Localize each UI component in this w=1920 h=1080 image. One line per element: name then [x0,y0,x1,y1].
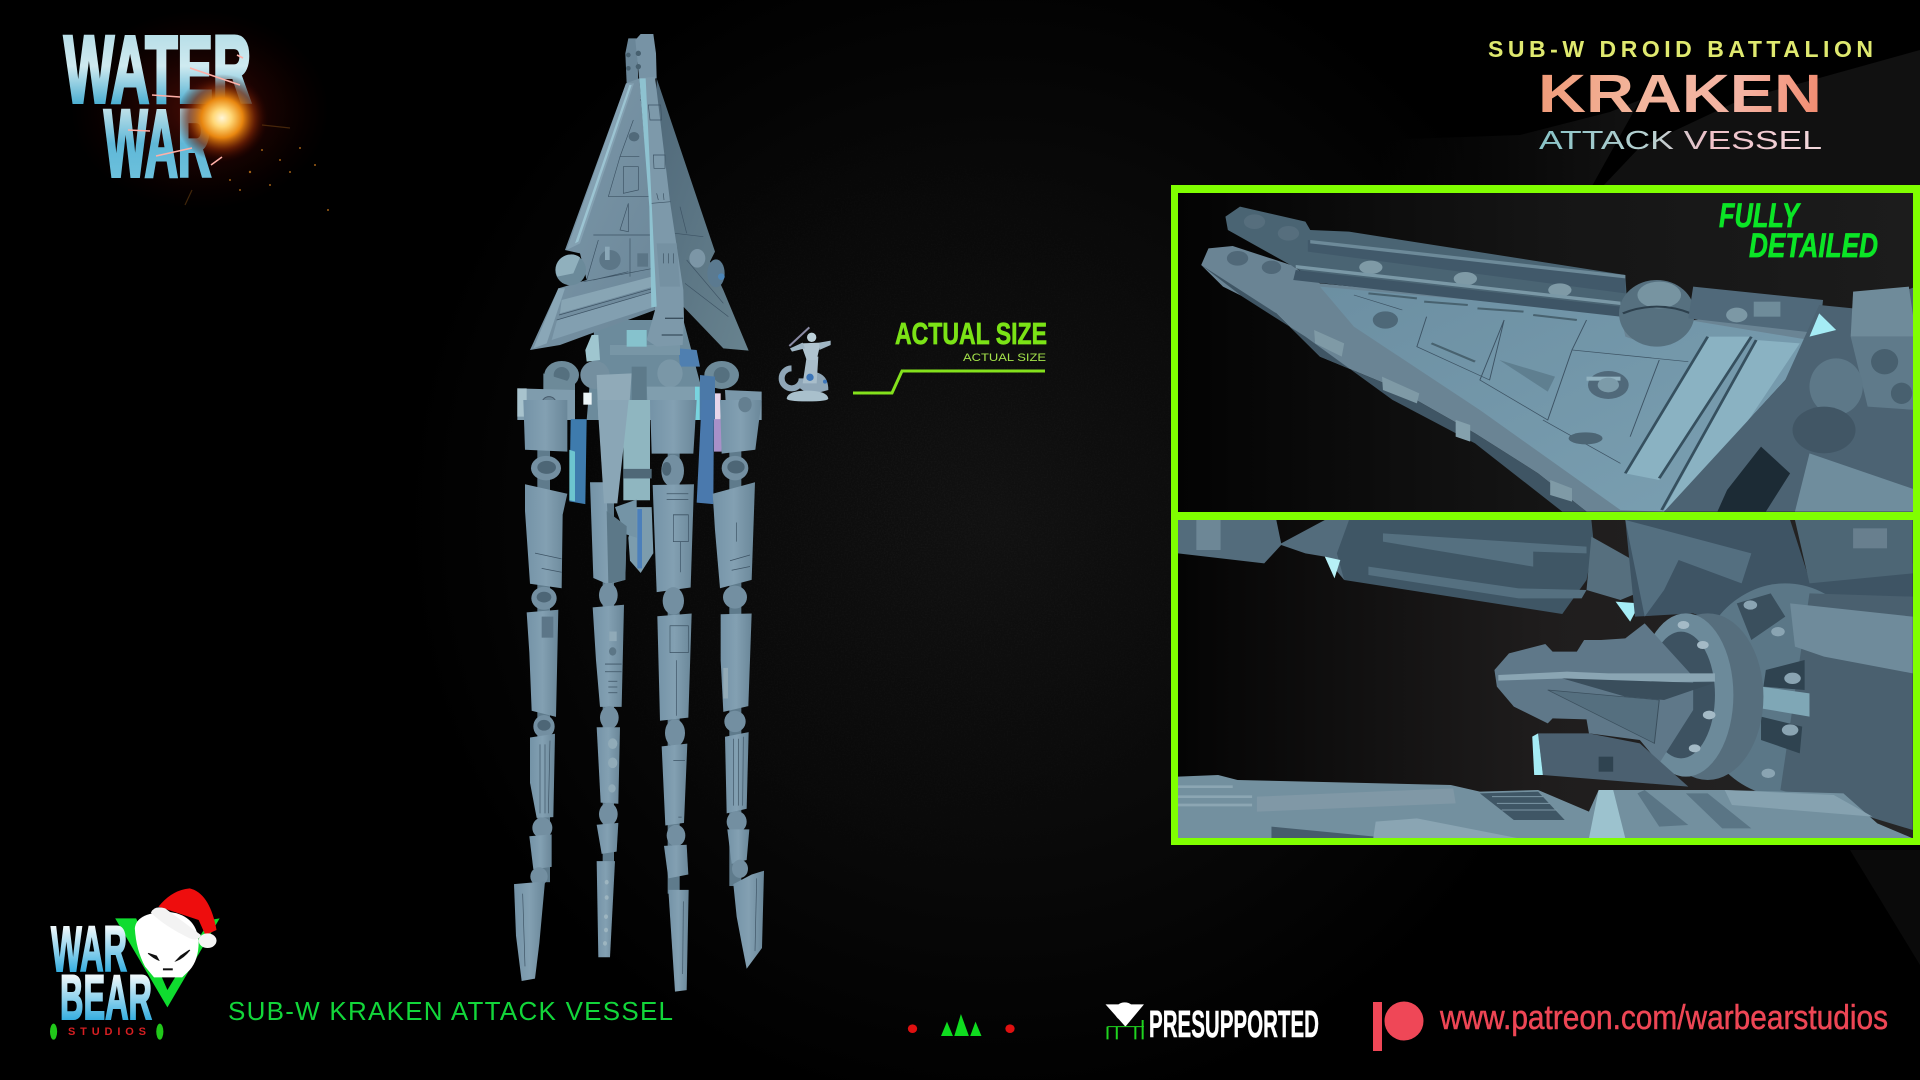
panel: wing detail [1178,193,1916,512]
logo: Water War: WATER [64,17,251,123]
lower wing bands [560,277,653,313]
right upper block [1625,520,1913,617]
title: battalion: SUB-W DROID BATTALION [1488,36,1873,62]
santa hat [158,888,217,935]
rear plate [1688,287,1823,333]
icon: patreon [1373,1002,1424,1051]
leg 3 [650,400,697,992]
hull stripes [1625,337,1751,480]
lower hull [1178,775,1913,838]
lower bracket [1538,733,1688,787]
badge: presupported [1106,1002,1319,1046]
subtitle: attack vessel: ATTACK VESSEL [1539,125,1822,155]
blue panels [569,400,722,504]
background [568,50,1920,964]
title: Kraken: KRAKEN [1538,64,1822,124]
logo word: studios: STUDIOS [68,1026,146,1038]
patreon link [1373,999,1888,1051]
label: fully detailed [1719,203,1878,258]
centre spine [639,77,684,347]
logo emblem [50,888,220,1040]
drum rear [1720,584,1825,792]
model: Kraken upper hull [530,34,749,351]
callout heading: ACTUAL SIZE [895,316,1047,351]
dark upper rail [1225,207,1628,313]
nozzle [1494,623,1693,763]
label: fully detailed: FULLY [1719,197,1801,235]
model: Kraken legs [514,397,764,992]
left wing face [530,78,655,350]
leg 2 [590,400,629,957]
hull grilles [1314,330,1344,357]
shoulder joints [544,361,579,389]
logo: Water War: WAR [104,91,211,197]
turrets [599,132,705,270]
title block [1488,36,1873,155]
hull tips [625,34,657,83]
panel: detail views frame [1171,185,1920,845]
hull turrets [1588,371,1629,399]
dome turret [1619,280,1695,347]
logo word: war: WAR [51,913,127,985]
upper arm block [1337,520,1594,614]
skull [135,912,199,977]
neck [587,320,710,420]
badge text: PRESUPPORTED [1149,1004,1319,1046]
centre thruster [615,400,653,573]
logo word: bear: BEAR [60,963,152,1033]
icon: festive trees and dots [908,1014,1015,1036]
logo: War Bear Studios [50,888,220,1040]
right machinery [1664,287,1916,512]
leg 1 [514,400,567,981]
model: Kraken body [517,320,762,420]
holly leaves [50,1024,57,1040]
label: fully detailed: DETAILED [1749,227,1878,265]
panel: thruster detail [1178,520,1913,838]
hull body [1201,246,1824,512]
callout leader line [853,371,1045,393]
logo: Water War [64,10,330,211]
figure: actual-size miniature [782,327,831,401]
hull face [1320,287,1809,512]
drum ring [1691,614,1764,780]
shoulder blocks [543,373,575,390]
left edge stripes [567,83,634,250]
leg 4 [713,397,764,969]
hull spheres [555,254,725,287]
callout sub-caption: ACTUAL SIZE [963,352,1046,364]
upper left arm [1178,520,1349,580]
elbow joint [1586,537,1633,600]
right wing face [653,78,749,351]
caption: model name: SUB-W KRAKEN ATTACK VESSEL [228,996,673,1026]
icon: presupported skull [1106,1002,1144,1039]
callout: actual size [853,316,1047,393]
